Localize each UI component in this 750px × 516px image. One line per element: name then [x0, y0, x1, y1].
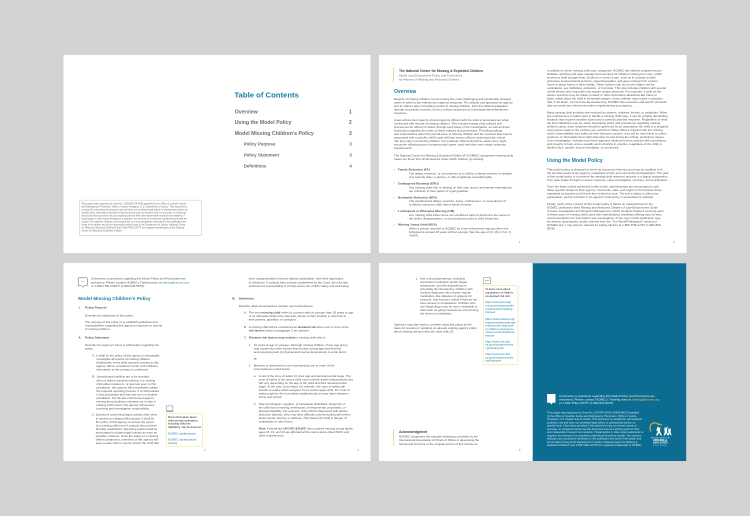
- section II: policy statement: policy:: [85, 347, 94, 351]
- section III: definitions: include a nearby adult caregiver. For a school-aged child, the zone of: [259, 388, 350, 392]
- column two text: and integrity to help ensure equality and inclusivity in practice, regardless of the child or: [547, 142, 662, 146]
- column two text: evidence or information that might otherwise be lost during the critical, preliminary stages: [547, 135, 664, 139]
- callout: links: ng/missing.cfm: [485, 346, 505, 350]
- disclaimer box: sought. The opinions, findings, and conclusions or recommendations expressed in this publication are: [82, 220, 187, 223]
- contents list: 3: [349, 153, 352, 158]
- section III: definitions: Describe what circumstances warrant report acceptance.: [239, 304, 314, 308]
- list: missing child categories: are unknown to their parent or legal guardian.: [409, 189, 469, 193]
- section II: policy statement: when a child is reported missing. If a missing: [96, 378, 156, 382]
- logo: national center for missing and exploited children: MISSING &: [654, 438, 667, 442]
- callout: links: trainees: [485, 310, 496, 314]
- column two text: children cases, each response should be governed by an assumption the child is in jeopardy: [547, 125, 669, 129]
- section III: definitions: home and school.: [259, 395, 282, 399]
- column two text: that can assist law enforcement when implementing your agency.: [547, 104, 633, 108]
- page numbers: 2: [673, 240, 675, 244]
- fine print: specific facts. Information provided in this document may not remain current or: [547, 424, 637, 428]
- acknowledgment: Acknowledgment: [399, 430, 428, 434]
- section II: policy statement: in relation to missing-child reports. It shall be: [96, 416, 155, 420]
- section III: definitions: may experience other factors listed below, young age itself and the: [254, 346, 342, 350]
- callout: exploitation resources: training: [168, 441, 178, 445]
- callout: links: https://www.theiacp.org/: [485, 317, 515, 321]
- section III: definitions: Is out of the zone of safety for their age and developmental stage. The: [259, 374, 351, 378]
- section III: definitions: risk factors listed in paragraph C are present.: [249, 328, 310, 332]
- logo: national center for missing and exploited children: EXPLOITED: [653, 441, 668, 445]
- panel: back cover: [533, 263, 686, 461]
- section III: definitions: III.: [232, 296, 236, 300]
- section III: definitions: or: [254, 356, 258, 360]
- disclaimer box: legal advice or other expert assistance is required, the services of a competent professional should be: [82, 217, 187, 220]
- list: missing child categories: Any missing child where there are insufficient facts to determine the cause of: [409, 213, 510, 217]
- disclaimer box: and Delinquency Prevention, Office of Justice Programs, U.S. Department of Justice. This document is: [82, 205, 188, 208]
- callout: links: ng/Abducted: [485, 359, 501, 363]
- column two continuation text: of residence. If custody has not been established by the Court, then the law: [249, 280, 349, 284]
- fine print: by the Office of Juvenile Justice and Delinquency Prevention, Office of Justice: [547, 414, 637, 418]
- section II: policy statement: child is paramount, members of this agency will: [96, 438, 158, 442]
- column two text: until reports made to the contrary are confirmed. When officers respond with the missing: [547, 128, 663, 132]
- using the model policy text: 5678).: [547, 226, 556, 230]
- column two text: child's vulnerabilities and safety as their foremost concern, they will be more likely to collect: [547, 132, 667, 136]
- organisation heading: Model Law Enforcement Policy and Procedures: [399, 73, 463, 77]
- section I: policy purpose: The purpose of this policy is to establish guidelines and: [85, 320, 158, 324]
- section III: definitions: 1.: [249, 343, 251, 347]
- disclaimer box: should use this document only as a starting point for their own independent research and analysis. If: [82, 214, 185, 217]
- list: missing child categories: the child's disappearance, or circumstances point to child is/was lost.: [409, 216, 500, 220]
- overview text: through successful recovery, forms a critical component of a thorough law-enforcement: [394, 108, 508, 112]
- section III: definitions: safety might be the immediate neighborhood or route taken between: [259, 391, 349, 395]
- section II: policy statement: agency will be considered at risk until sufficient: [96, 364, 158, 368]
- list: missing child categories: The taking, retention, or concealment of a child by a family member in violation: [409, 171, 513, 175]
- list item c: Has a drug dependency, including: [420, 277, 465, 281]
- callout: links: To learn more about: [485, 287, 510, 291]
- section III: definitions: A missing child will be considered an elevated risk when one or more of the: [249, 325, 349, 329]
- page numbers: [519, 240, 675, 244]
- using the model policy text: of this model policy is to present the missing child response process in a logical progression: [547, 174, 668, 178]
- fine print: findings, and conclusions expressed in this publication are those of the author and: [547, 437, 642, 441]
- using the model policy text: explanation, and its inclusion in an agency's final policy or procedures is optional.: [547, 195, 654, 199]
- section III: definitions: a.: [254, 374, 256, 378]
- column two text: family's race, gender, sexual orientation, or community.: [547, 146, 619, 150]
- fine print: accurate, so recipients should use this document only as a starting point for their: [547, 427, 639, 431]
- callout: links: trauma: [485, 334, 494, 338]
- column two text: home or group home or other facility. These children can be at even higher risk for: [547, 83, 655, 87]
- section II: policy statement: C.: [92, 413, 95, 417]
- section III: definitions: 10 years of age or younger. Although missing children of any age group: [254, 343, 348, 347]
- using the model policy text: This model policy is designed to serve as a general reference and may be modified to fit: [547, 167, 663, 171]
- acknowledgment: NCMEC recognizes the valuable assistance provided by the: [399, 434, 478, 438]
- list item c: potentially life-threatening. Children with: [420, 287, 473, 291]
- list: missing child categories: Family Abduction (FA): [398, 168, 430, 172]
- contents list: 3: [349, 142, 352, 147]
- overview text: cases to which a law enforcement agency responds. The attitude and approach an agency: [394, 100, 513, 104]
- contents list: Policy Purpose: [244, 142, 276, 147]
- section III: definitions: b.: [254, 402, 256, 406]
- overview text: The National Center for Missing & Exploited Children® (NCMEC) categorizes missing child: [394, 154, 514, 158]
- overview text: [394, 97, 514, 161]
- page number: 5: [519, 448, 521, 452]
- overview text: encounter differing types of missing child cases, each with their own unique response: [394, 142, 506, 146]
- contents list: 2: [349, 120, 352, 126]
- section II: policy statement: encouraged to obtain legal custody as soon as: [96, 430, 157, 434]
- section II: policy statement: the required reporting process. If a child resides: [96, 389, 160, 393]
- heading: overview: Overview: [394, 89, 416, 95]
- acknowledgment: [393, 430, 480, 446]
- section II: policy statement: [79, 335, 160, 445]
- icon: computer screen: [484, 278, 491, 284]
- fine print: do not reflect those of the Department of Justice. National Center for Missing &: [547, 440, 638, 444]
- organisation heading: for Reports of Missing and Abducted Children: [399, 77, 460, 81]
- callout: exploitation resources: including child sex: [168, 422, 191, 426]
- using the model policy text: be viewed, downloaded, and/or ordered from the "Our Work/Publications" section of: [547, 220, 657, 224]
- callout: exploitation resources: trafficking, can be found at:: [168, 425, 202, 429]
- section III: definitions: Note: Federal law (34 USC §41307) also requires missing young adults: [259, 426, 353, 430]
- section III: definitions: [232, 296, 355, 438]
- list item c: have access to medications. Children who: [420, 301, 476, 305]
- callout: links: projects/relationship-law-: [485, 320, 516, 324]
- title: table of contents: Table of Contents: [234, 91, 299, 100]
- callout: links: ca.gov/programs/missi: [485, 343, 514, 347]
- fine print: Exploited Children® and 1-800-THE-LOST® are registered trademarks of NCMEC.: [547, 443, 642, 447]
- using the model policy text: the specific needs of any agency, regardless of size and community demographics. The goal: [547, 171, 669, 175]
- column two text: lights, which place the child in immediate danger. Some children may require medication: [547, 97, 663, 101]
- fine print: purposes only and does not constitute legal advice or professional opinion on: [547, 420, 636, 424]
- section II: policy statement: missing child report, this agency will assume: [96, 403, 155, 407]
- page numbers: 1: [519, 240, 521, 244]
- list item c: [416, 277, 479, 316]
- accent bar: [392, 68, 395, 82]
- list item c: use illegal drugs may be more vulnerable to: [420, 305, 478, 309]
- disclaimer box: specific facts. Information provided in this document may not remain current or accurate, so recipients: [82, 211, 187, 214]
- icon: speech bubble: [547, 394, 556, 405]
- callout: exploitation resources: NCMEC.org/education/: [168, 438, 197, 442]
- list: missing child categories: Lost/Injured or Otherwise Missing (LIM): [398, 209, 454, 213]
- agency note: about missing persons who are older than 20.: [394, 330, 454, 334]
- section II: policy statement: of a missing child even if custody has not been: [96, 423, 157, 427]
- callout: exploitation resources: [166, 414, 203, 447]
- column two text: situation that requires decisive action and a carefully planned response. Regardless of what: [547, 118, 667, 122]
- panel: final text page: [379, 263, 533, 461]
- agency note: basis for creating or updating an already existing agency policy: [394, 326, 477, 330]
- overview text: associated with a specific child's case will help ensure officers understand the critical: [394, 136, 505, 140]
- disclaimer box: Center for Missing & Exploited Children.: [82, 229, 123, 232]
- column two text: law enforcement is called upon to handle a missing child case, it can be a highly demanding: [547, 114, 668, 118]
- section III: definitions: zone of safety is the area a child may routinely travel independently and: [259, 377, 353, 381]
- section III: definitions: spectrum disorder, they may have difficulty communicating with others: [259, 412, 351, 416]
- callout: exploitation resources: More information about: [168, 415, 197, 419]
- using the model policy text: from case intake through on-scene response, case investigation, recovery, and reunification.: [547, 178, 668, 182]
- list: missing child categories: 41307): [409, 233, 418, 237]
- section III: definitions: other requirements.: [259, 434, 285, 438]
- column two text: protective services/social services, parents/guardian, and goes missing from a foster: [547, 79, 658, 83]
- section I: policy purpose: Policy Purpose: [85, 305, 107, 309]
- panel: table of contents page: [64, 55, 370, 253]
- callout: links: violence-and-childhood-: [485, 330, 515, 334]
- column two text: that, if not taken, can become life-threatening. NCMEC has resources and search protocols: [547, 100, 667, 104]
- callout: links: youth/anchor/tracking/: [485, 307, 513, 311]
- disclaimer box: for Missing & Exploited Children® and 1-800-THE-LOST® are registered trademarks of the National: [82, 226, 185, 229]
- section I: policy purpose: of missing children.: [85, 327, 111, 331]
- using the model policy text: of these types of missing child cases with individualized checklists offering step-by-step: [547, 212, 662, 216]
- acknowledgment: International Association of Chiefs of Police in developing the: [399, 438, 480, 442]
- using the model policy text: recommendations for successful case investigation. A free copy of this publication may: [547, 216, 661, 220]
- overview text: confronted with reports of missing children. This includes having clear policies and: [394, 122, 502, 126]
- overview text: A law enforcement agency should equip its officers with the tools to accurately act when: [394, 118, 509, 122]
- callout: links: https://www.jstor.org/: [485, 300, 511, 304]
- section II: policy statement: Additionally, every child reported missing to this: [96, 360, 159, 364]
- section II: policy statement: reporting and investigative responsibility.: [96, 407, 150, 411]
- contents list: [235, 110, 352, 168]
- list: missing child categories: of a custody order, a decree, or other legitimate custodial rights.: [409, 175, 493, 179]
- using the model policy text: those specific unique to their agency, community, state, and region or incorporate those: [547, 188, 662, 192]
- contents list: Policy Statement: [244, 153, 280, 158]
- using the model policy text: NCMEC publication titled Missing and Abducted Children: A Law-Enforcement Guide: [547, 206, 658, 210]
- section I: policy purpose: [79, 305, 163, 331]
- column two text: autism spectrum may be drawn to water or other hazardous attractions like trains or: [547, 93, 657, 97]
- column two text: Many missing child incidents are resolved by parents, relatives, friends, or neighbors. When: [547, 111, 668, 115]
- column two continuation text: enforcement responsibility is to help ensure the child's safety and well-being.: [249, 284, 349, 288]
- overview text: cases per these five circumstances under which children go missing:: [394, 157, 484, 161]
- contact note: welcomed. Please contact NCMEC's Training team at training@ncmec.org: [559, 397, 659, 401]
- callout: links: to-children-exposed-to-: [485, 327, 514, 331]
- section III: definitions: The term missing child refers to a person who is younger than 18 years of age,: [249, 310, 354, 314]
- page numbers: 4: [357, 448, 359, 452]
- contact note: Comments or questions regarding this Model Policy and Procedures are: [91, 277, 186, 281]
- section III: definitions: Elevated risk factors may include a missing child who is: [249, 335, 326, 339]
- callout: links: https://www.cdc.dhs.: [485, 352, 511, 356]
- section II: policy statement: in this jurisdiction and was last seen in another: [96, 392, 158, 396]
- column two text: In addition to these missing child case categories, NCMEC has tailored programming to: [547, 69, 662, 73]
- logo: national center for missing and exploited children: NATIONAL CENTER FOR: [651, 436, 670, 439]
- section III: definitions: about needs, identity, or address. This places the child in danger of: [259, 416, 347, 420]
- column two text: facilitate reporting and case management services for children missing from care, which: [547, 72, 663, 76]
- column two text: of an investigation. Includes that these agencies implement these policies with consistency: [547, 139, 666, 143]
- disclaimer box: [80, 200, 202, 236]
- logo: national center for missing and exploited children: [650, 423, 672, 447]
- list: missing child categories: Endangered Runaway (ERU): [398, 181, 439, 185]
- fine print: own independent research and analysis. If legal advice or other expert assistance is: [547, 430, 644, 434]
- section II: policy statement: the policy of this agency to accept the report: [96, 420, 154, 424]
- section III: definitions: will vary depending on the age of the child and their developmental: [259, 381, 347, 385]
- icon: computer screen: [166, 406, 173, 412]
- section III: definitions: B.: [244, 325, 247, 329]
- list item c: prescribed medication and/or illegal: [420, 280, 467, 284]
- list: missing child categories: Any missing child who is missing on their own accord and whose whereabouts: [409, 185, 512, 189]
- list: missing child categories: The unauthorized taking, retention, luring, confinement, or concealment of: [409, 199, 506, 203]
- disclaimer box: provided for informational purposes only and does not constitute legal advice or professional opinion on: [82, 208, 189, 211]
- section II: policy statement: Questions concerning legal custody often arise: [96, 413, 158, 417]
- column two text: needs whose case response may require unique protocols. For example, a child on the: [547, 90, 662, 94]
- acknowledgment: format and structure of the original version of this document.: [399, 442, 478, 446]
- section III: definitions: or as otherwise defined by state law, whose current location is unknown to: [249, 314, 346, 318]
- contents list: Definitions: [244, 163, 267, 168]
- section II: policy statement: investigate all reports of missing children.: [96, 357, 151, 361]
- agency note: Agencies may also wish to consider using this policy as the: [394, 322, 472, 326]
- callout: links: enforcement-response-: [485, 324, 514, 328]
- logo: national center for missing and exploited children: CHILDREN: [654, 445, 667, 447]
- list: missing child categories: a child by someone other than a family member.: [409, 202, 472, 206]
- section III: definitions: exploitation or other harm.: [259, 419, 293, 423]
- section I: policy purpose: I.: [79, 305, 81, 309]
- fine print: Programs, U.S. Department of Justice. This document is provided for informational: [547, 417, 642, 421]
- section III: definitions: C.: [244, 335, 247, 339]
- section III: definitions: stage. In the case of an infant, for example, the zone of safety will: [259, 384, 345, 388]
- callout: links: https://www.cdc.dhs.: [485, 339, 511, 343]
- list: missing child categories: Nonfamily Abduction (NFA): [398, 195, 437, 199]
- using the model policy text: [547, 167, 669, 230]
- section II: policy statement: child either resides in, or was last seen in this: [96, 382, 156, 386]
- callout: links: [483, 286, 518, 364]
- contents list: 1: [349, 110, 352, 116]
- section III: definitions: the child has a learning, intellectual, developmental, psychiatric, or: [259, 405, 346, 409]
- overview text: requirements.: [394, 146, 412, 150]
- overview text: Reports of missing children can be among the most challenging and emotionally charged: [394, 97, 511, 101]
- callout: links: at elevated risk visit:: [485, 294, 511, 298]
- page numbers: 3: [204, 448, 206, 452]
- column two text: exploitation, sex trafficking, abduction, or homicide. This also includes children with special: [547, 86, 666, 90]
- section III: definitions: accompanying lack of physical and mental development is a risk factor.: [254, 350, 347, 354]
- list item c: c.: [416, 277, 418, 281]
- section III: definitions: A.: [244, 310, 247, 314]
- section III: definitions: 2.: [249, 363, 251, 367]
- fine print: This project was supported by Grant No. 15PJDP-24-GK-01924-MECP awarded: [547, 411, 640, 415]
- callout: exploitation resources: child sexual exploitation,: [168, 418, 199, 422]
- section II: policy statement: It shall be the policy of this agency to thoroughly: [96, 353, 160, 357]
- list: missing child categories: When a person reported to NCMEC by a law enforcement agency when the: [409, 226, 509, 230]
- section II: policy statement: II.: [79, 335, 81, 339]
- contents list: Overview: [235, 110, 259, 116]
- section III: definitions: Believed or determined to be experiencing one or more of the: [254, 363, 335, 367]
- section III: definitions: ages 18, 19, and 20 are afforded all the same above listed NCIC and: [259, 430, 349, 434]
- contents list: 3: [349, 131, 352, 137]
- fine print: required, the services of a competent professional should be sought. The opinions,: [547, 433, 642, 437]
- disclaimer box: This project was supported by Grant No. 2020-MC-FX-K004 awarded by the Office of Juvenile Justice: [82, 202, 187, 205]
- panel: model policy page: [64, 263, 370, 461]
- section II: policy statement: B.: [92, 375, 95, 379]
- overview text: procedures for officers to follow through each stage of the investigation, as well as direct: [394, 125, 510, 129]
- disclaimer box: those of the author and do not necessarily reflect those of the Department of Justice. National Center: [82, 223, 186, 226]
- section III: definitions: their parents, guardian, or caregiver.: [249, 318, 297, 322]
- using the model policy text: NCMEC.org; it may also be ordered by calling toll-free at 1-800-THE-LOST (1-800-843-: [547, 223, 662, 227]
- overview text: and examinations about the overall issue of missing children and the nuances that may be: [394, 132, 513, 136]
- heading: using the model policy: Using the Model Policy: [547, 158, 603, 164]
- column two text: [547, 69, 669, 150]
- section II: policy statement: Jurisdictional conflicts are to be avoided: [96, 375, 149, 379]
- organisation heading: The National Center for Missing & Exploited Children: [399, 69, 483, 73]
- column two text: the first indications may be, when developing policy and procedures regarding missing: [547, 121, 661, 125]
- column two text: involves a child younger than 18 who is in need of care, such as in custody of child: [547, 76, 656, 80]
- column two continuation text: been inappropriately removed without explanation, from their legal place: [249, 277, 344, 281]
- section II: policy statement: Describe the agency's intent or philosophy regarding the: [85, 343, 159, 347]
- list item c: risks such as gang involvement or becoming: [420, 308, 479, 312]
- section II: policy statement: formally established. Reporting parties shall be: [96, 427, 158, 431]
- contact note: or 1-800-THE-LOST® (1-800-843-5678).: [91, 284, 145, 288]
- using the model policy text: Finally, much of the content of this model policy is based on material found in the: [547, 202, 653, 206]
- page numbers: [204, 448, 359, 452]
- list: missing child categories: [393, 168, 513, 237]
- icon: speech bubble: [78, 278, 87, 287]
- callout: links: populations of children: [485, 290, 514, 294]
- list: missing child categories: individual is at least 18 years old but younger than the age of 21. (34 U.S.C. §: [409, 230, 511, 234]
- callout: links: ca.gov/programs/missi: [485, 355, 514, 359]
- section III: definitions: circumstances noted below.: [254, 367, 290, 371]
- section III: definitions: Has neurological, cognitive, or behavioral disabilities. Determine if: [259, 402, 345, 406]
- section I: policy purpose: Describe the objectives of this policy.: [85, 313, 134, 317]
- heading: model missing children's policy: Model Missing Children's Policy: [78, 296, 151, 302]
- list item c: the victim of exploitation.: [420, 312, 453, 316]
- callout: exploitation resources: NCMEC.org/theissues: [168, 431, 196, 435]
- section II: policy statement: possible; however, since the safety of a missing: [96, 434, 159, 438]
- section II: policy statement: Policy Statement: [85, 335, 109, 339]
- list item c: medication, like diabetes or epilepsy for: [420, 294, 472, 298]
- overview text: response.: [394, 111, 407, 115]
- section I: policy purpose: responsibilities regarding this agency's response to reports: [85, 324, 163, 328]
- list item c: substances, and the dependency is: [420, 284, 467, 288]
- contact note: welcomed. Please contact NCMEC's Training team at training@ncmec.org: [91, 280, 189, 284]
- organisation heading: [399, 69, 483, 81]
- panel: overview page: [379, 55, 686, 253]
- section III: definitions: physical disability. For example, if the child is diagnosed with autism: [259, 409, 348, 413]
- using the model policy text: mandated by statutes at all levels from federal to local. The text in italics is offered as: [547, 192, 659, 196]
- list item c: medical diagnoses who require regular: [420, 291, 471, 295]
- section II: policy statement: jurisdiction, but the law enforcement agency: [95, 396, 155, 400]
- contact note: or 1-800-THE-LOST® (1-800-843-5678).: [559, 401, 614, 405]
- section II: policy statement: open a case when it can be shown the child has: [96, 441, 159, 445]
- section II: policy statement: A.: [92, 353, 95, 357]
- list: missing child categories: Missing Young Adult (MYA): [398, 223, 437, 227]
- section II: policy statement: serving that jurisdiction chooses not to take a: [96, 400, 156, 404]
- contents list: 4: [349, 163, 352, 168]
- section II: policy statement: information to the contrary is confirmed.: [96, 368, 149, 372]
- contents list: Model Missing Children's Policy: [235, 131, 314, 137]
- overview text: and its officers take in handling reports of missing children, from the initial investigation: [394, 104, 508, 108]
- overview text: instruction regarding the intent of those policies and procedures. Providing training: [394, 128, 502, 132]
- using the model policy text: From the basic outline presented in this model, administrators are encouraged to add: [547, 185, 659, 189]
- section II: policy statement: jurisdiction, this agency will immediately initiate: [95, 385, 158, 389]
- callout: links: resources/systemwide/: [485, 304, 514, 308]
- list item c: example, may become critical if they do not: [420, 298, 477, 302]
- contents list: Using the Model Policy: [235, 120, 292, 126]
- overview text: role they play in protecting children. For example, officers should be aware they might: [394, 139, 506, 143]
- using the model policy text: to Case Investigation and Program Management, which contains chapters covering each: [547, 209, 664, 213]
- contact note: Comments or questions regarding this Model Policy and Procedure are: [559, 394, 655, 398]
- section III: definitions: Definitions: [239, 296, 255, 300]
